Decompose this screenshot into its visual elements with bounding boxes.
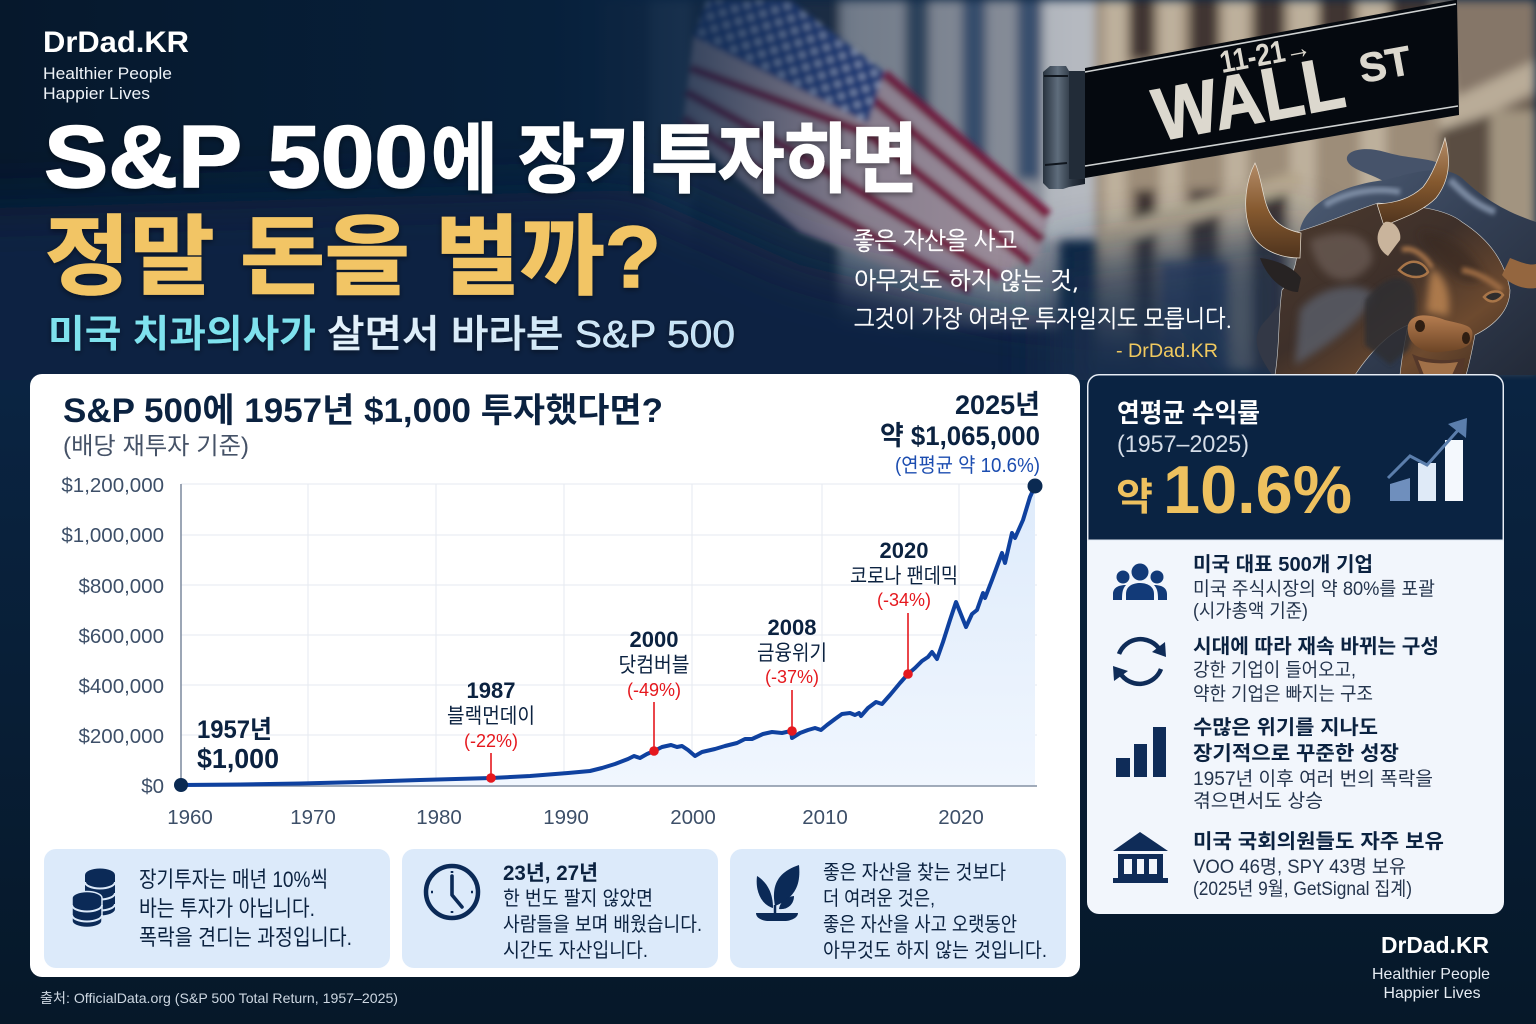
subtitle — [48, 314, 735, 356]
subtitle: 살면서 바라본 S&P 500 — [327, 314, 735, 356]
item: long-term growth: 겪으면서도 상승 — [1193, 790, 1323, 812]
icon: clock — [426, 866, 478, 918]
callout: start value: $1,000 — [197, 743, 279, 774]
logo: top left: Healthier People — [43, 64, 172, 83]
chart heading: (배당 재투자 기준) — [63, 433, 249, 460]
crash marker: 2000: (-49%) — [627, 680, 681, 700]
crash marker: 2020: (-34%) — [877, 590, 931, 610]
item: congress holdings: (2025년 9월, GetSignal 집계) — [1193, 878, 1412, 900]
title: S&P 500 — [44, 107, 428, 206]
info box: hold good assets — [730, 849, 1066, 968]
chart heading: S&P 500에 1957년 $1,000 투자했다면? — [63, 392, 663, 430]
callout: start value: 1957년 — [197, 716, 272, 744]
chart heading — [63, 392, 663, 460]
item: long-term growth: 장기적으로 꾸준한 성장 — [1193, 742, 1399, 765]
callout: 2025 final value: 약 $1,065,000 — [880, 421, 1040, 451]
panel: chart card — [30, 374, 1080, 977]
x axis labels: 2010 — [802, 806, 848, 829]
x axis labels: 1960 — [167, 806, 213, 829]
x axis labels: 1990 — [543, 806, 589, 829]
street sign: Wall St: 11-21→ — [1217, 29, 1314, 80]
info box: time is an asset: 한 번도 팔지 않았면 — [503, 887, 653, 910]
bull shading — [1295, 232, 1502, 365]
x axis labels: 1970 — [290, 806, 336, 829]
item: 500 companies: (시가총액 기준) — [1193, 600, 1308, 622]
panel: annual return sidebar — [1087, 374, 1504, 914]
icon: institution building — [1113, 832, 1168, 883]
return header: 약 — [1116, 477, 1153, 519]
x axis labels: 1980 — [416, 806, 462, 829]
info box: time is an asset: 사람들을 보며 배웠습니다. — [503, 913, 702, 936]
item: 500 companies — [1113, 553, 1435, 622]
item: changing composition — [1113, 635, 1439, 705]
quote: 좋은 자산을 사고 — [853, 228, 1017, 253]
street sign: Wall St: WALL — [1147, 40, 1351, 157]
item: changing composition: 시대에 따라 재속 바뀌는 구성 — [1193, 635, 1439, 658]
quote — [853, 228, 1232, 362]
info box: hold good assets: 더 여려운 것은, — [823, 887, 935, 910]
S&P 500 growth curve — [181, 486, 1035, 785]
item: 500 companies: 미국 대표 500개 기업 — [1193, 553, 1373, 576]
area under curve — [181, 486, 1035, 786]
icon: rising bars with arrow — [1388, 418, 1467, 501]
return header: 10.6% — [1163, 452, 1352, 528]
info box: hold good assets: 아무것도 하지 않는 것입니다. — [823, 939, 1047, 962]
y axis labels: $200,000 — [78, 725, 164, 748]
crash marker: 2000 — [618, 627, 690, 756]
crash marker: 2008 — [757, 615, 827, 736]
icon: refresh arrows — [1113, 639, 1166, 684]
item: long-term growth: 수많은 위기를 지나도 — [1193, 716, 1378, 739]
crash marker: 2020: 2020 — [880, 538, 928, 563]
info box: hold good assets: 좋은 자산을 찾는 것보다 — [823, 861, 1006, 884]
logo: bottom right — [1372, 932, 1490, 1002]
item: changing composition: 강한 기업이 들어오고, — [1193, 659, 1356, 681]
y axis labels: $800,000 — [78, 575, 164, 598]
y axis labels: $0 — [141, 775, 164, 798]
return header: (1957–2025) — [1117, 431, 1249, 458]
y axis labels: $1,000,000 — [61, 524, 164, 547]
crash marker: 2000: 2000 — [630, 627, 678, 652]
crash marker: 2008: 2008 — [768, 615, 816, 640]
item: congress holdings: 미국 국회의원들도 자주 보유 — [1193, 830, 1444, 853]
info box: time is an asset: 23년, 27년 — [503, 862, 598, 885]
start and end points — [174, 478, 1042, 792]
icon: bars — [1116, 727, 1166, 777]
crash marker: 2020: 코로나 팬데믹 — [850, 565, 958, 588]
crash marker: 1987: 블랙먼데이 — [447, 705, 535, 728]
title: 정말 돈을 벌까? — [45, 209, 661, 306]
subtitle: 미국 치과의사가 — [48, 314, 316, 356]
info box: endure crashes — [44, 849, 390, 968]
title: 에 장기투자하면 — [431, 118, 918, 203]
info box: endure crashes: 폭락을 견디는 과정입니다. — [139, 925, 352, 950]
y axis labels: $1,200,000 — [61, 474, 164, 497]
quote: 그것이 가장 어려운 투자일지도 모릅니다. — [854, 306, 1232, 331]
line chart — [61, 474, 1042, 829]
item: congress holdings — [1113, 830, 1444, 900]
logo: bottom right: DrDad.KR — [1381, 932, 1489, 958]
quote: 아무것도 하지 않는 것, — [854, 269, 1079, 293]
logo: bottom right: Healthier People — [1372, 966, 1490, 983]
icon: people — [1113, 564, 1167, 600]
y axis labels: $400,000 — [78, 675, 164, 698]
icon: plant — [756, 865, 799, 921]
info box: endure crashes: 장기투자는 매년 10%씩 — [139, 867, 328, 892]
info box: hold good assets: 좋은 자산을 사고 오랫동안 — [823, 913, 1017, 936]
y axis labels — [61, 474, 164, 798]
logo: top left: DrDad.KR — [43, 26, 189, 59]
x axis labels: 2000 — [670, 806, 716, 829]
callout: start value — [197, 716, 279, 774]
item: long-term growth — [1116, 716, 1433, 812]
crash marker: 2000: 닷컴버블 — [618, 654, 690, 677]
street sign: Wall St: ST — [1355, 37, 1415, 92]
item: long-term growth: 1957년 이후 여러 번의 폭락을 — [1193, 768, 1433, 790]
y axis labels: $600,000 — [78, 625, 164, 648]
callout: 2025 final value — [880, 390, 1040, 477]
callout: 2025 final value: 2025년 — [955, 390, 1040, 420]
item: 500 companies: 미국 주식시장의 약 80%를 포괄 — [1193, 578, 1435, 600]
info box: time is an asset — [402, 849, 718, 968]
crash marker: 2008: 금융위기 — [757, 642, 827, 665]
info box: endure crashes: 바는 투자가 아닙니다. — [139, 896, 315, 921]
street sign: Wall St — [1043, 0, 1459, 189]
icon: coins — [72, 868, 115, 928]
item: changing composition: 약한 기업은 빠지는 구조 — [1193, 683, 1373, 705]
x axis labels — [167, 806, 984, 829]
x axis labels: 2020 — [938, 806, 984, 829]
info box: time is an asset: 시간도 자산입니다. — [503, 939, 648, 962]
American flag — [682, 0, 1048, 295]
quote: - DrDad.KR — [1116, 341, 1218, 362]
crash marker: 1987 — [447, 678, 535, 783]
crash marker: 2008: (-37%) — [765, 667, 819, 687]
item: congress holdings: VOO 46명, SPY 43명 보유 — [1193, 856, 1406, 878]
bull statue — [1246, 138, 1536, 375]
crash marker: 1987: (-22%) — [464, 731, 518, 751]
crash marker: 2020 — [850, 538, 958, 679]
return header: 연평균 수익률 — [1117, 398, 1260, 428]
logo: top left: Happier Lives — [43, 84, 150, 103]
logo: bottom right: Happier Lives — [1384, 985, 1480, 1002]
callout: 2025 final value: (연평균 약 10.6%) — [895, 454, 1040, 477]
return header — [1088, 375, 1503, 540]
title — [44, 107, 918, 306]
logo: top left — [43, 26, 189, 103]
source note: 출처: OfficialData.org (S&P 500 Total Return, 1957–2025) — [40, 990, 398, 1006]
crash marker: 1987: 1987 — [467, 678, 515, 703]
